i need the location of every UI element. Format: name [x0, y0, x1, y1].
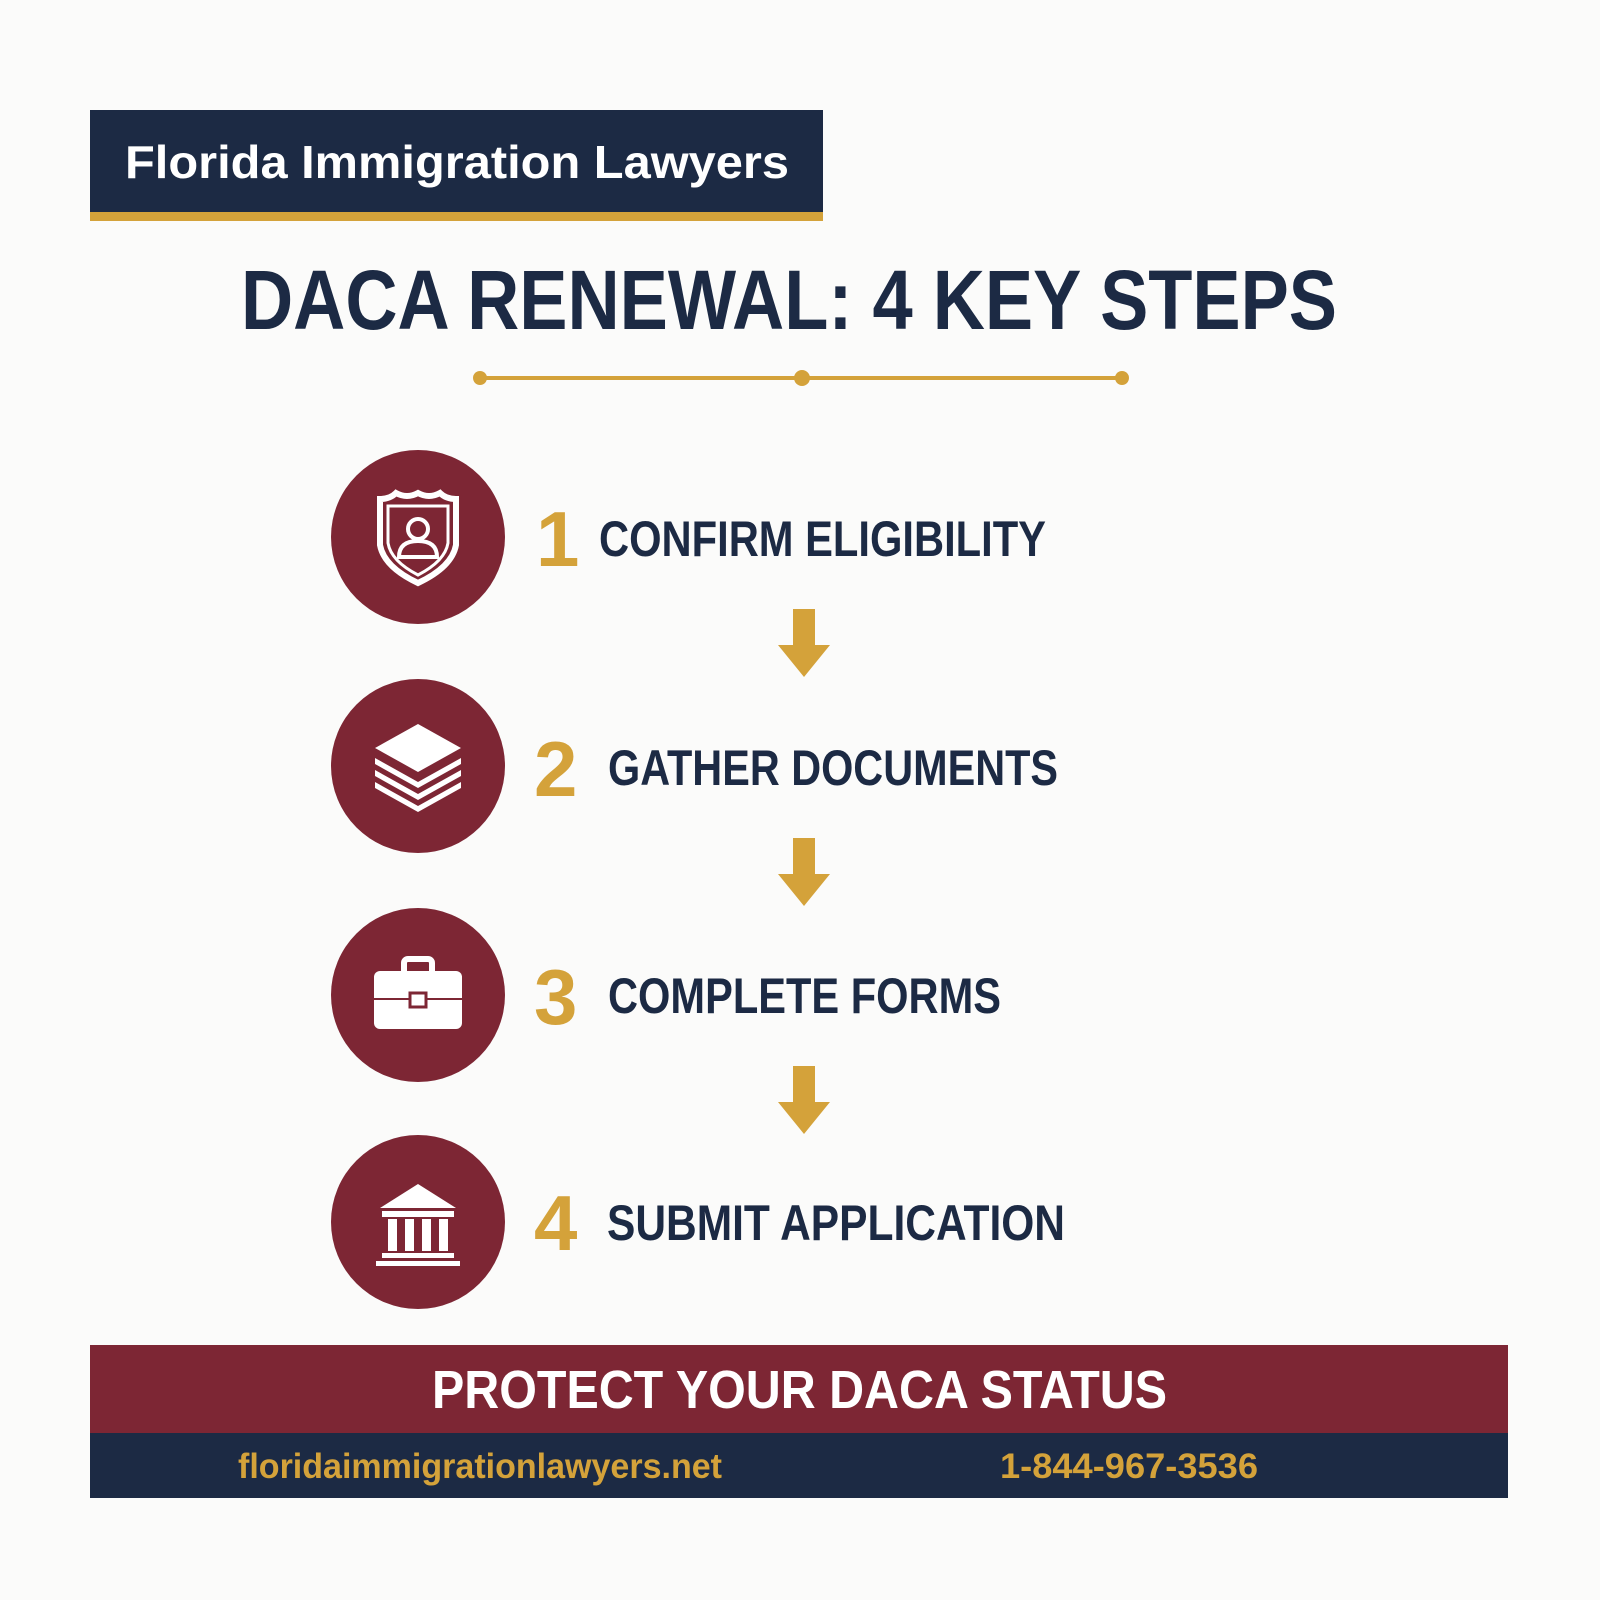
- label 1: CONFIRM ELIGIBILITY: [599, 511, 1046, 567]
- footer banner: [90, 1345, 1508, 1498]
- title: DACA RENEWAL: 4 KEY STEPS: [241, 253, 1337, 347]
- banner headline: PROTECT YOUR DACA STATUS: [432, 1360, 1167, 1420]
- step 4: [331, 1135, 1065, 1309]
- header box: Florida Immigration Lawyers: [125, 136, 789, 188]
- phone: 1-844-967-3536: [1000, 1447, 1258, 1486]
- step 1: [331, 450, 1046, 624]
- number 3: 3: [534, 953, 577, 1041]
- label 3: COMPLETE FORMS: [608, 968, 1001, 1024]
- step 2: [331, 679, 1058, 853]
- divider: [473, 370, 1129, 386]
- icon: briefcase: [331, 908, 505, 1082]
- number 2: 2: [534, 725, 577, 813]
- number 1: 1: [536, 495, 579, 583]
- arrow 3: [778, 1066, 830, 1134]
- icon: shield person: [331, 450, 505, 624]
- icon: government building: [331, 1135, 505, 1309]
- header box: [90, 110, 823, 221]
- number 4: 4: [534, 1179, 577, 1267]
- label 4: SUBMIT APPLICATION: [607, 1195, 1065, 1251]
- arrow 1: [778, 609, 830, 677]
- arrow 2: [778, 838, 830, 906]
- step 3: [331, 908, 1001, 1082]
- icon: document stack: [331, 679, 505, 853]
- website: floridaimmigrationlawyers.net: [238, 1447, 722, 1486]
- label 2: GATHER DOCUMENTS: [608, 740, 1058, 796]
